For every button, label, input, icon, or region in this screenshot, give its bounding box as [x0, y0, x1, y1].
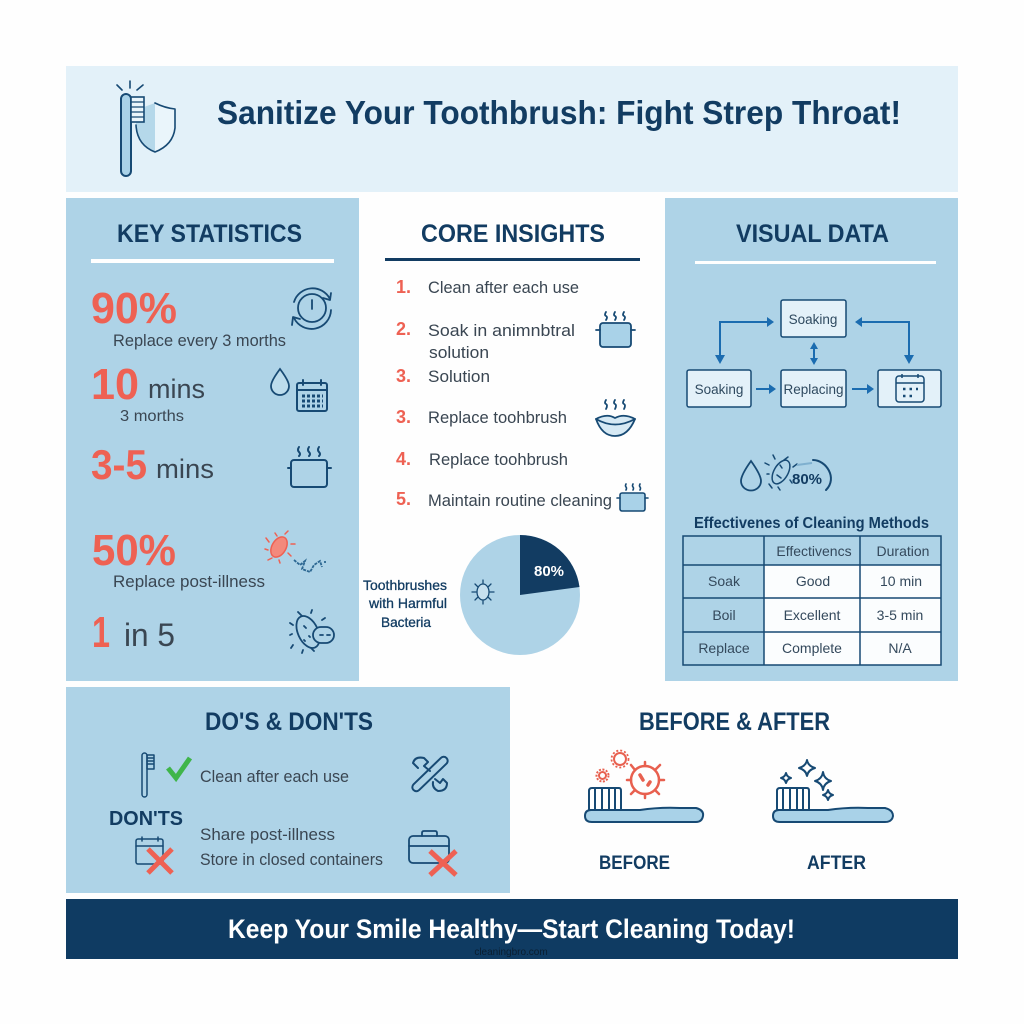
- flow box: soaking left: [687, 370, 751, 407]
- heading: do's and don'ts: DO'S & DON'TS: [205, 708, 373, 736]
- icon: lips with steam: [596, 400, 635, 436]
- table: cleaning methods: Duration: [877, 543, 929, 559]
- icon: pot: [596, 312, 635, 347]
- icon: clean toothbrush with sparkles: [773, 760, 893, 822]
- icon: water drop: [271, 369, 289, 395]
- panel: key statistics: [66, 198, 359, 681]
- icon: bacteria: [290, 610, 334, 653]
- table: cleaning methods: Excellent: [784, 607, 841, 623]
- germ small: [596, 770, 608, 782]
- call to action: Keep Your Smile Healthy—Start Cleaning Today!: [228, 914, 795, 944]
- icon: calendar: [297, 380, 327, 411]
- table: cleaning methods: Good: [796, 573, 830, 589]
- stat: 50%: 50%: [92, 526, 176, 575]
- panel: visual data: [665, 198, 958, 681]
- list of insights: Maintain routine cleaning: [428, 492, 612, 510]
- panel: header: [66, 66, 958, 192]
- list of insights: Soak in animnbtral: [428, 322, 575, 340]
- table: cleaning methods: Effectivencs: [776, 543, 852, 559]
- list of insights: 2.: [396, 319, 411, 339]
- icon: crossed tools: [411, 755, 449, 793]
- panel: key statistics: in 5: [124, 617, 175, 653]
- pie chart: [460, 535, 580, 655]
- panel: key statistics: Replace every 3 morths: [113, 331, 286, 350]
- flow diagram: [687, 300, 941, 407]
- germ medium: [612, 750, 628, 768]
- list of insights: 5.: [396, 489, 411, 509]
- table: cleaning methods: 10 min: [880, 573, 922, 589]
- icon: toothbrush with germs: [585, 750, 703, 822]
- stat: 3-5 mins: 3-5: [91, 441, 147, 488]
- list of insights: [396, 277, 612, 510]
- panel: do's and don'ts: [66, 687, 510, 893]
- icon: germ: [472, 580, 494, 604]
- panel: core insights: [363, 220, 648, 655]
- flow box: soaking left: Soaking: [695, 382, 743, 397]
- flow box: replacing: [781, 370, 846, 407]
- icon: molecules: [294, 560, 325, 572]
- don't text: [200, 826, 383, 869]
- watermark: cleaningbro.com: [474, 947, 548, 958]
- list of insights: solution: [429, 344, 489, 362]
- pie label: [363, 577, 447, 630]
- list of insights: 3.: [396, 366, 411, 386]
- list of insights: Replace toohbrush: [429, 451, 568, 469]
- list of insights: 4.: [396, 449, 411, 469]
- panel: key statistics: mins: [148, 374, 205, 404]
- don't text: Store in closed containers: [200, 851, 383, 869]
- pie label: with Harmful: [368, 595, 447, 611]
- list of insights: Clean after each use: [428, 279, 579, 297]
- pie label: Bacteria: [381, 614, 431, 630]
- icon: water drop: [741, 461, 761, 490]
- title: Sanitize Your Toothbrush: Fight Strep Throat!: [217, 94, 901, 131]
- list of insights: Replace toohbrush: [428, 409, 567, 427]
- pie label: Toothbrushes: [363, 577, 447, 593]
- icon: green check: [168, 758, 190, 778]
- table: cleaning methods: N/A: [888, 640, 912, 656]
- heading: key statistics: KEY STATISTICS: [117, 220, 302, 248]
- panel: before and after: [585, 708, 893, 874]
- table: cleaning methods: 3-5 min: [877, 607, 923, 623]
- do text: Clean after each use: [200, 768, 349, 786]
- don't text: Share post-illness: [200, 826, 335, 844]
- stat: 10 mins: 10: [91, 360, 139, 409]
- flow box: replacing: Replacing: [783, 382, 844, 397]
- footer banner: [66, 899, 958, 959]
- list of insights: Solution: [428, 368, 490, 386]
- heading: core insights: CORE INSIGHTS: [421, 220, 605, 248]
- icon: toothbrush and shield: [117, 81, 175, 176]
- list of insights: 1.: [396, 277, 411, 297]
- flow box: calendar: [878, 370, 941, 407]
- icon: toothbrush: [142, 753, 154, 797]
- icon: steaming pot: [288, 447, 331, 487]
- stat: 90%: 90%: [91, 284, 177, 333]
- heading: before and after: BEFORE & AFTER: [639, 708, 830, 736]
- table: cleaning methods: Complete: [782, 640, 842, 656]
- stat: 1 in 5: 1: [92, 608, 110, 657]
- icon: calendar with cross: [136, 837, 172, 873]
- table heading: Effectivenes of Cleaning Methods: [694, 515, 929, 532]
- icon: bacterium with 80% gauge: 80%: [792, 471, 822, 488]
- table: cleaning methods: Soak: [708, 573, 741, 589]
- icon: red bacterium: [265, 531, 295, 563]
- panel: key statistics: mins: [156, 454, 214, 484]
- flow box: soaking top: Soaking: [789, 312, 837, 327]
- heading: visual data: VISUAL DATA: [736, 220, 889, 248]
- table: cleaning methods: [683, 536, 941, 665]
- panel: key statistics: 3 morths: [120, 408, 184, 425]
- label: before: BEFORE: [599, 853, 670, 874]
- flow box: soaking top: [781, 300, 846, 337]
- panel: key statistics: Replace post-illness: [113, 572, 265, 591]
- pie value: 80%: [534, 563, 564, 580]
- table: cleaning methods: Replace: [698, 640, 750, 656]
- icon: clock cycle: [292, 288, 331, 329]
- flow arrows: [715, 317, 914, 394]
- germ large: [627, 762, 664, 798]
- icon: case with cross: [409, 831, 456, 875]
- label: after: AFTER: [807, 853, 866, 874]
- list of insights: 3.: [396, 407, 411, 427]
- icon: bacterium with 80% gauge: [765, 455, 831, 490]
- icon: small pot: [617, 484, 648, 511]
- subheading: don'ts: DON'TS: [109, 808, 183, 830]
- table: cleaning methods: Boil: [712, 607, 736, 623]
